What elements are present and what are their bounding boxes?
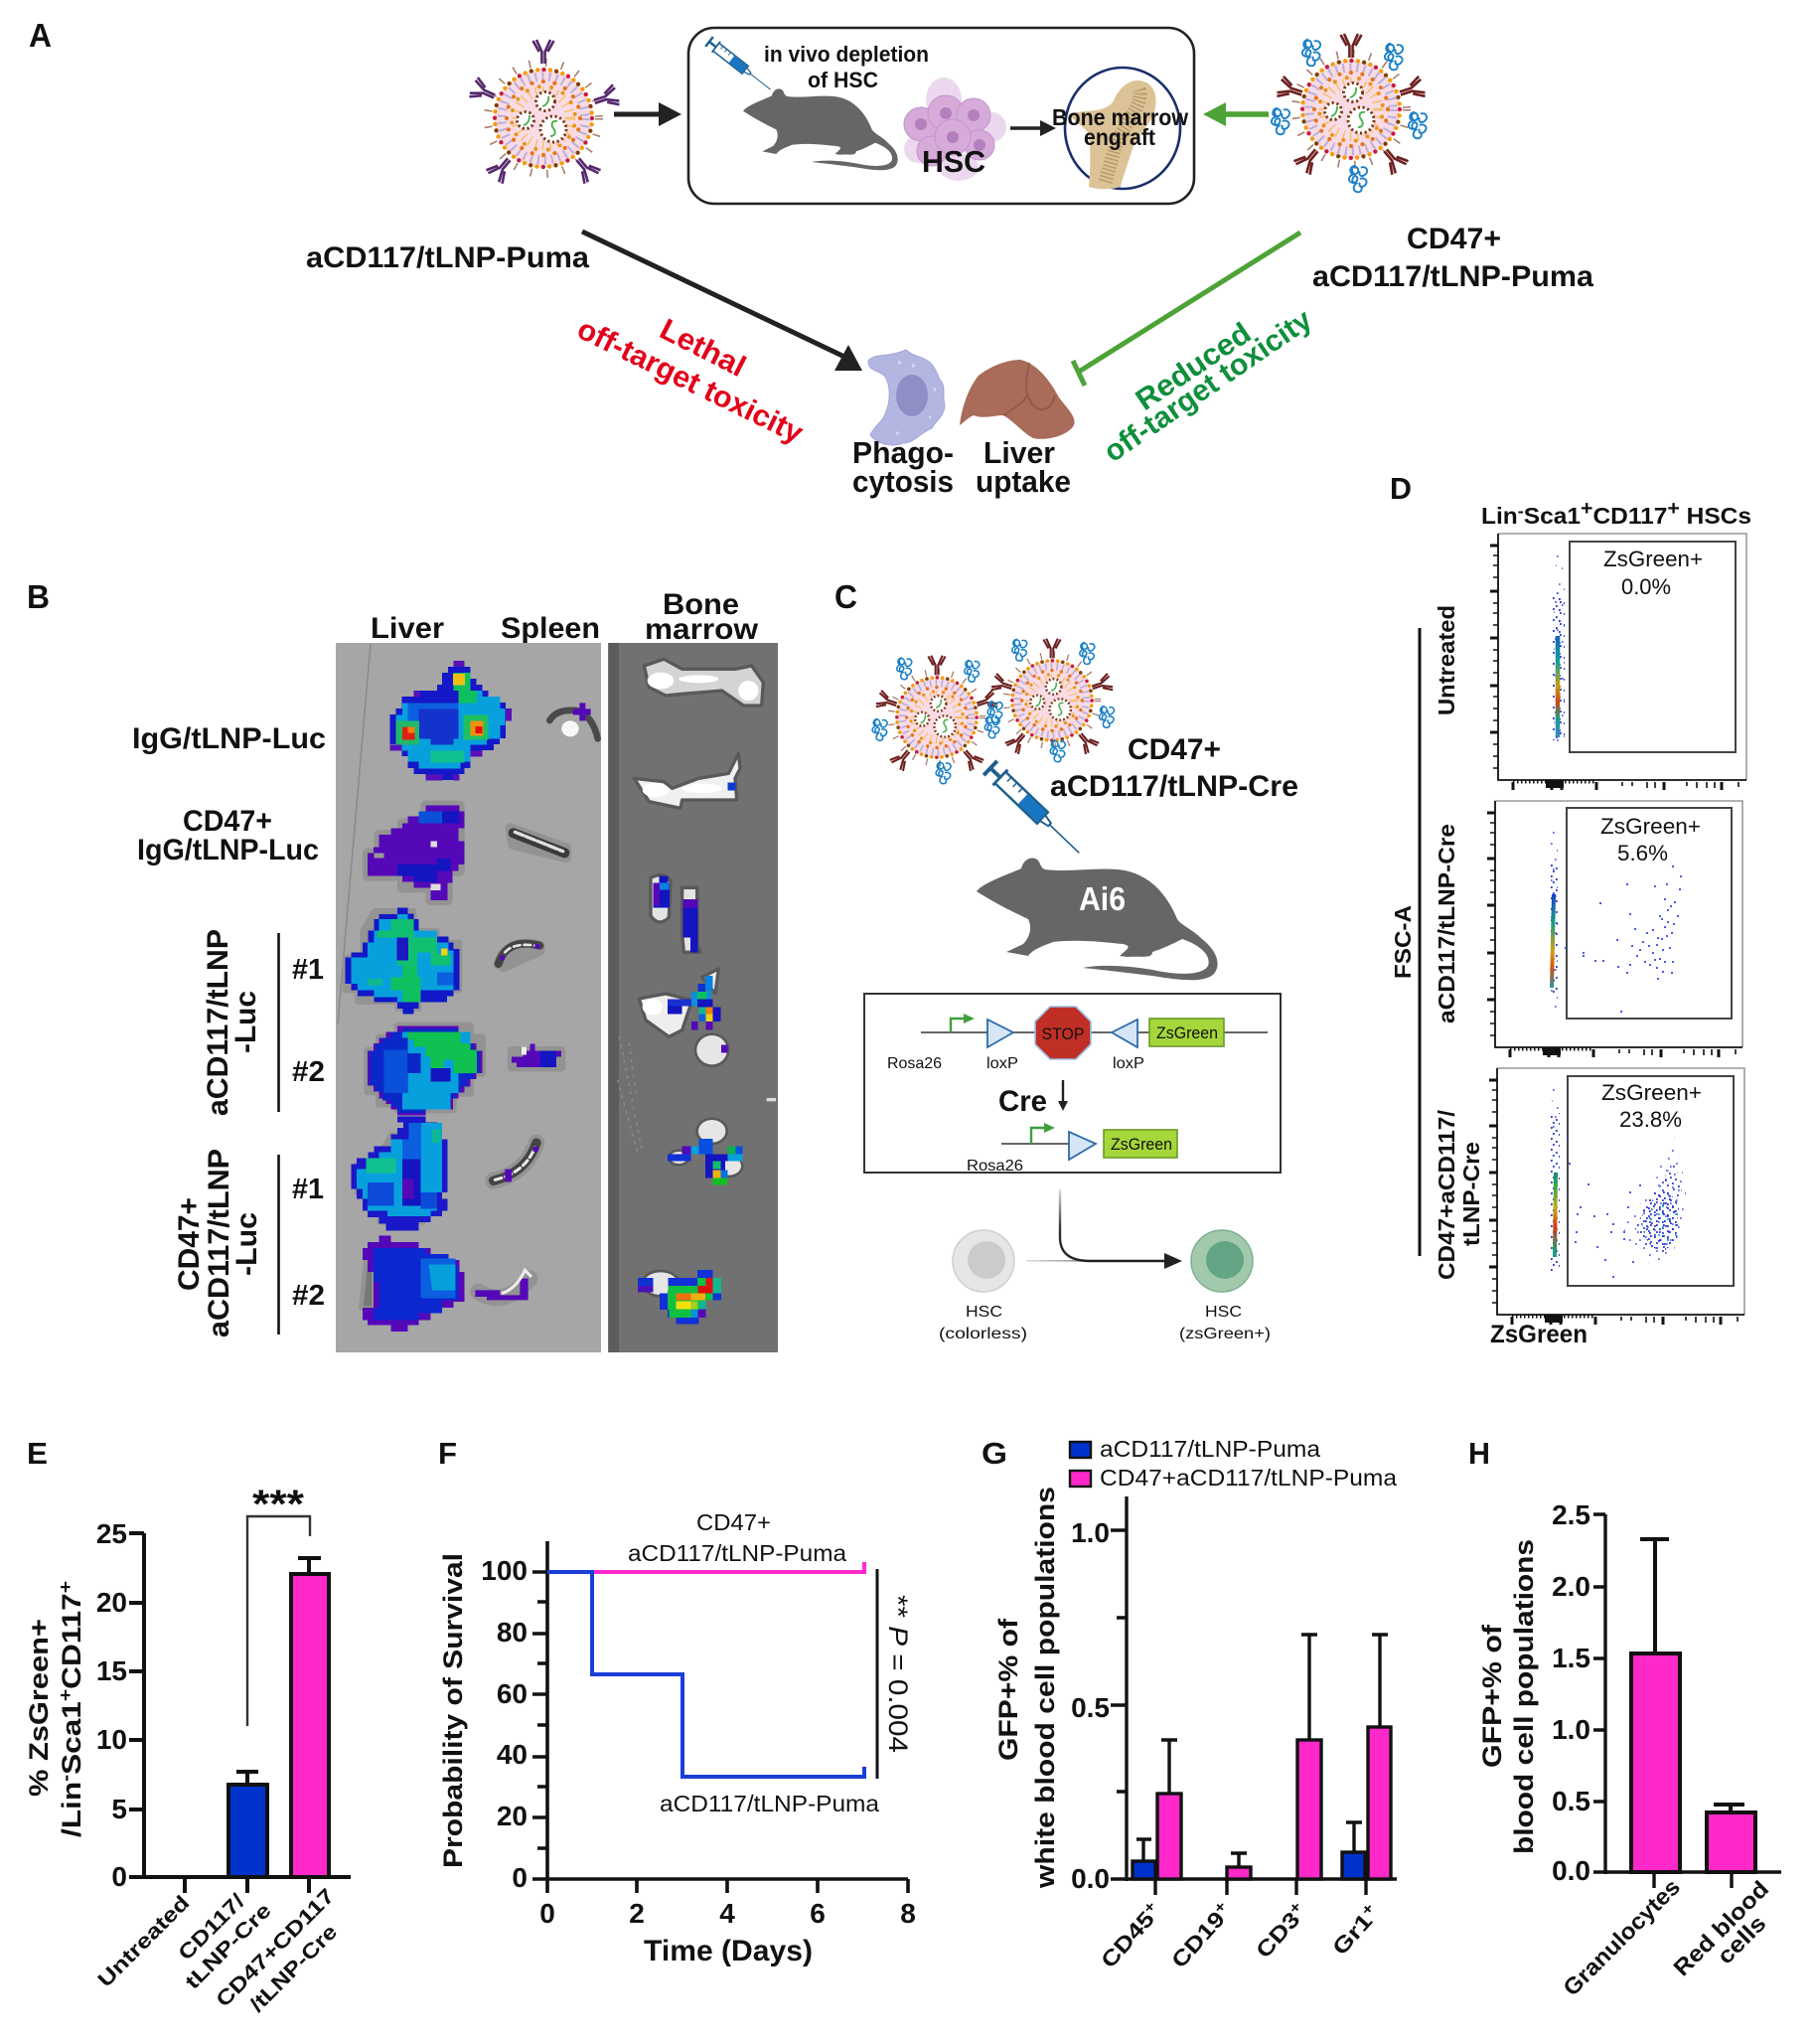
y tick labels: 0.5 — [1071, 1692, 1110, 1723]
spleen 5 — [494, 1143, 538, 1181]
y tick labels: 60 — [497, 1678, 528, 1709]
row labels: aCD117/tLNP-Cre — [1434, 824, 1459, 1023]
axes and ticks — [532, 1541, 908, 1893]
liver 5 — [351, 1116, 448, 1230]
ZsGreen box top: ZsGreen — [1156, 1023, 1218, 1042]
panel letter B: B — [27, 578, 50, 615]
y tick labels — [96, 1518, 127, 1892]
spleen 2 — [514, 832, 564, 853]
arrow: HSC to bone marrow — [1010, 120, 1056, 136]
icon: CD47 coated LNP — [1272, 34, 1427, 192]
icon: syringe — [705, 37, 775, 94]
title: Lin-Sca1+CD117+ HSCs: Sca1 — [1524, 503, 1581, 529]
flow plot: CD47+aCD117/tLNP-Cre: ZsGreen+ — [1601, 1080, 1702, 1105]
label: Bone marrow engraft — [1052, 104, 1188, 150]
x category labels: CD47+CD117 — [212, 1885, 339, 2012]
y tick labels: 20 — [96, 1587, 127, 1618]
panel letter C: C — [834, 578, 857, 615]
arrow: HSC colorless to zsGreen — [1026, 1189, 1182, 1269]
row labels: -Luc — [229, 991, 262, 1053]
panel letter D: D — [1390, 471, 1412, 506]
x category labels: CD3 — [1251, 1914, 1298, 1963]
label: (colorless) — [939, 1326, 1027, 1342]
title: Lin-Sca1+CD117+ HSCs: + — [1581, 498, 1592, 520]
liver 1 — [390, 661, 512, 780]
spleen 6 — [475, 1270, 531, 1300]
bars — [1133, 1635, 1391, 1879]
y axis label: + — [56, 1581, 76, 1593]
row labels: -Luc — [230, 1212, 263, 1276]
label: Cre with arrow: Cre — [998, 1085, 1047, 1118]
label: CD47+ aCD117/tLNP-Puma — [1312, 223, 1593, 293]
significance bracket — [247, 1483, 310, 1726]
y axis label: blood cell populations — [1509, 1539, 1539, 1854]
label: Ai6: Ai6 — [1079, 880, 1126, 917]
x category labels — [1095, 1898, 1385, 1972]
bars — [1631, 1539, 1755, 1872]
ZsGreen box bottom: ZsGreen — [1111, 1135, 1172, 1154]
x tick labels: 6 — [810, 1898, 826, 1929]
callout: lethal off-target toxicity: Lethal — [655, 313, 751, 384]
y tick labels: 0.0 — [1552, 1855, 1590, 1886]
scatter cluster — [1567, 1133, 1687, 1277]
label — [1179, 1304, 1271, 1342]
row labels: aCD117/tLNP — [202, 929, 234, 1116]
ZsGreen box bottom — [1104, 1130, 1177, 1158]
flow plot: aCD117/tLNP-Cre: ZsGreen+ — [1600, 814, 1701, 839]
x category labels: tLNP-Cre — [181, 1899, 276, 1994]
x category labels: CD19 — [1166, 1915, 1222, 1972]
label: Liver uptake — [976, 435, 1071, 499]
y tick labels: 5 — [111, 1794, 127, 1824]
y tick labels — [1552, 1499, 1590, 1886]
y tick labels — [481, 1555, 528, 1893]
label: HSC — [1205, 1304, 1242, 1321]
y tick labels: 2.5 — [1552, 1499, 1590, 1530]
callout: reduced off-target toxicity: Reduced — [1130, 317, 1257, 417]
column headers: Spleen — [501, 612, 600, 645]
x category labels: CD117/ — [174, 1890, 249, 1965]
x category labels: CD45 — [1096, 1915, 1151, 1972]
y tick labels: 2.0 — [1552, 1571, 1590, 1602]
column headers: Bone — [663, 588, 739, 621]
title: Lin-Sca1+CD117+ HSCs: + — [1667, 498, 1680, 520]
spleen 4 — [512, 1044, 561, 1067]
label: Liver uptake: Liver — [983, 435, 1055, 470]
arrow: LNP to in vivo box — [614, 102, 681, 126]
row labels: #1 — [292, 1174, 324, 1205]
label: Cre with arrow — [998, 1080, 1068, 1118]
construct labels: Rosa26 — [967, 1158, 1023, 1175]
inhibition line: green T bar — [1073, 233, 1300, 386]
text: in vivo depletion of HSC: in vivo depletion — [764, 42, 929, 67]
panel letter H: H — [1468, 1436, 1490, 1471]
y tick labels: 0 — [111, 1861, 127, 1892]
curve: aCD117 group — [547, 1572, 864, 1777]
row labels: #2 — [292, 1280, 325, 1312]
x category labels: /tLNP-Cre — [245, 1921, 342, 2017]
panel H: blood cell bar chart — [1468, 1436, 1781, 2001]
panel letter G: G — [982, 1436, 1007, 1471]
x category labels: Gr1 — [1327, 1915, 1371, 1960]
label: CD47+ aCD117/tLNP-Cre: CD47+ — [1128, 733, 1221, 766]
x category labels: cells — [1712, 1910, 1771, 1969]
label — [939, 1304, 1027, 1342]
construct labels: Rosa26 — [887, 1055, 942, 1072]
callout: lethal off-target toxicity: off-target toxicity — [572, 313, 809, 450]
label: CD47+ aCD117/tLNP-Puma: aCD117/tLNP-Puma — [1312, 260, 1593, 293]
label: CD47+ aCD117/tLNP-Puma: CD47+ — [696, 1509, 771, 1535]
x category labels: Untreated — [93, 1891, 194, 1992]
callout: reduced off-target toxicity: off-target toxicity — [1098, 303, 1318, 469]
y tick labels: 0.0 — [1071, 1863, 1110, 1894]
construct labels: loxP — [986, 1055, 1018, 1072]
y tick labels: 80 — [497, 1617, 528, 1648]
x tick labels: 0 — [539, 1898, 555, 1929]
column headers: marrow — [645, 613, 759, 646]
x category labels — [93, 1885, 342, 2017]
x tick labels: 4 — [719, 1898, 735, 1929]
legend — [1070, 1436, 1397, 1491]
panel letter A: A — [29, 17, 52, 54]
icon: Ai6 mouse — [977, 858, 1218, 980]
p value line: ** P = 0.004 — [883, 1595, 913, 1753]
y tick labels: 0.5 — [1552, 1786, 1590, 1816]
x category labels: Granulocytes — [1558, 1874, 1685, 2001]
label: CD47+ aCD117/tLNP-Puma: aCD117/tLNP-Puma — [628, 1540, 846, 1566]
legend: CD47+aCD117/tLNP-Puma — [1100, 1465, 1397, 1491]
flow plot: untreated: ZsGreen+ — [1603, 547, 1703, 571]
row labels: IgG/tLNP-Luc — [132, 722, 326, 755]
column headers — [371, 588, 759, 646]
axes and ticks — [1593, 1514, 1781, 1888]
icon: syringe — [983, 760, 1087, 861]
y axis label — [1477, 1539, 1539, 1854]
label: CD47+ aCD117/tLNP-Cre — [1050, 733, 1298, 803]
row labels: aCD117/tLNP — [203, 1149, 235, 1337]
label: FSC-A: FSC-A — [1390, 905, 1416, 979]
flow plot: aCD117/tLNP-Cre — [1487, 801, 1742, 1057]
y tick labels: 100 — [481, 1555, 528, 1586]
y axis label: Sca1 — [57, 1701, 86, 1775]
flow plot: CD47+aCD117/tLNP-Cre — [1489, 1068, 1744, 1325]
x category labels: + — [1358, 1900, 1378, 1919]
curve: CD47+ group — [592, 1562, 864, 1572]
label: aCD117/tLNP-Puma: aCD117/tLNP-Puma — [306, 241, 589, 274]
x category labels: + — [1211, 1898, 1230, 1917]
label: HSC — [966, 1304, 1002, 1321]
y tick labels: 20 — [497, 1801, 528, 1831]
liver 4 — [368, 1025, 482, 1116]
lower organs — [351, 1025, 561, 1332]
construct labels — [887, 1055, 1144, 1175]
flow plot: untreated — [1490, 534, 1746, 790]
axes and ticks — [1111, 1496, 1397, 1895]
icon: HSC cell cluster — [904, 78, 1006, 181]
title: Lin-Sca1+CD117+ HSCs: HSCs — [1680, 503, 1751, 529]
liver 2 — [368, 806, 465, 900]
icon: mouse silhouette — [743, 88, 898, 170]
label: Phago-cytosis: cytosis — [852, 464, 954, 499]
y tick labels: 0 — [512, 1862, 528, 1893]
y axis label: CD117 — [57, 1593, 86, 1689]
label: Bone marrow engraft: Bone marrow — [1052, 104, 1188, 130]
y axis label: + — [56, 1689, 76, 1701]
icon: phagocyte — [868, 350, 945, 445]
panel: in vivo depletion box — [688, 28, 1194, 204]
x axis label: ZsGreen: ZsGreen — [1490, 1321, 1588, 1348]
y tick labels: 40 — [497, 1739, 528, 1770]
tissue halos — [345, 806, 566, 1009]
y axis label: % ZsGreen+ — [24, 1619, 54, 1797]
y axis label: GFP+% of — [1477, 1624, 1507, 1768]
y axis label: Probability of Survival — [438, 1553, 468, 1868]
icon: aCD117 targeted LNP — [468, 40, 620, 185]
x category labels: + — [1140, 1898, 1159, 1917]
panel C: Ai6 reporter mouse experiment — [834, 578, 1298, 1342]
y tick labels: 10 — [96, 1724, 127, 1755]
label: Liver uptake: uptake — [976, 464, 1071, 499]
flow plot: CD47+aCD117/tLNP-Cre: 23.8% — [1619, 1107, 1682, 1132]
x category labels: + — [1286, 1898, 1305, 1918]
panel B: IVIS organ imaging — [27, 578, 778, 1352]
panel F: survival curve — [438, 1436, 916, 1967]
panel: Rosa26 construct box — [864, 994, 1281, 1175]
row labels: CD47+ — [183, 805, 272, 838]
x tick labels: 2 — [629, 1898, 645, 1929]
title: Lin-Sca1+CD117+ HSCs: Lin — [1481, 503, 1516, 529]
panel A: nanoparticle strategy overview — [29, 17, 1593, 499]
y axis label — [24, 1581, 86, 1837]
text: in vivo depletion of HSC: of HSC — [808, 68, 878, 92]
icon: bone marrow circle — [1052, 68, 1188, 189]
x axis label: Time (Days) — [644, 1935, 813, 1967]
y tick labels — [1071, 1517, 1110, 1894]
row labels: IgG/tLNP-Luc — [137, 834, 319, 866]
panel letter E: E — [27, 1436, 48, 1471]
legend: aCD117/tLNP-Puma — [1100, 1436, 1320, 1462]
y tick labels: 1.5 — [1552, 1643, 1590, 1673]
x tick labels — [539, 1898, 916, 1929]
y axis label: white blood cell populations — [1030, 1487, 1060, 1889]
spleen 3 — [499, 944, 539, 964]
upper organs — [345, 661, 598, 1015]
arrow: black diagonal to phagocytosis — [582, 232, 862, 371]
label: CD47+ aCD117/tLNP-Puma: CD47+ — [1407, 223, 1501, 255]
row labels: Untreated — [1434, 605, 1459, 715]
label: HSC: HSC — [922, 144, 985, 179]
row labels: tLNP-Cre — [1458, 1142, 1484, 1246]
panel D: flow cytometry plots — [1390, 471, 1751, 1348]
text: in vivo depletion of HSC — [764, 42, 929, 92]
arrow: green arrow to in vivo box — [1203, 102, 1269, 126]
x category labels — [1558, 1874, 1773, 2001]
construct labels: loxP — [1113, 1055, 1144, 1072]
x category labels: Red blood — [1668, 1875, 1773, 1981]
title: Lin-Sca1+CD117+ HSCs: - — [1518, 502, 1524, 521]
y tick labels: 15 — [96, 1655, 127, 1686]
row labels: #1 — [292, 954, 324, 986]
row labels: CD47+ — [173, 1197, 206, 1291]
ZsGreen box top — [1149, 1019, 1224, 1046]
imaging photo: liver and spleen — [336, 643, 601, 1352]
STOP sign — [1035, 1007, 1091, 1059]
label: CD47+ aCD117/tLNP-Puma — [628, 1509, 846, 1566]
row labels — [1434, 605, 1484, 1280]
flow plot: aCD117/tLNP-Cre: 5.6% — [1617, 841, 1668, 865]
panel G: white blood cell bar chart — [982, 1436, 1397, 1972]
loxP triangles — [987, 1020, 1137, 1160]
significance bracket: *** — [252, 1483, 304, 1526]
title: Lin-Sca1+CD117+ HSCs: CD117 — [1592, 503, 1667, 529]
row labels — [132, 722, 326, 1337]
icon: liver — [960, 360, 1075, 439]
axes and ticks — [129, 1533, 351, 1893]
label: Bone marrow engraft: engraft — [1084, 124, 1155, 150]
imaging photo: bone marrow — [608, 643, 778, 1352]
y axis label — [993, 1487, 1060, 1889]
row labels: #2 — [292, 1056, 325, 1088]
y axis label: /Lin — [57, 1790, 86, 1837]
panel letter F: F — [438, 1436, 457, 1471]
row labels: CD47+aCD117/ — [1434, 1109, 1459, 1280]
liver 6 — [363, 1235, 464, 1332]
STOP sign: STOP — [1041, 1024, 1085, 1043]
spleen 1 — [549, 703, 598, 738]
y tick labels: 25 — [96, 1518, 127, 1549]
y tick labels: 1.0 — [1071, 1517, 1110, 1548]
label: (zsGreen+) — [1179, 1326, 1271, 1342]
icon: HSC colorless — [939, 1230, 1027, 1342]
y tick labels: 1.0 — [1552, 1714, 1590, 1745]
column headers: Liver — [371, 612, 444, 645]
label: CD47+ aCD117/tLNP-Cre: aCD117/tLNP-Cre — [1050, 770, 1298, 803]
x tick labels: 8 — [900, 1898, 916, 1929]
icon: two CD47 coated LNPs — [872, 639, 1114, 784]
liver 3 — [345, 907, 460, 1015]
y axis label: GFP+% of — [993, 1618, 1023, 1761]
flow plot: untreated: 0.0% — [1621, 574, 1671, 599]
bracket line — [1419, 628, 1421, 1256]
icon: HSC zsGreen positive — [1179, 1230, 1271, 1342]
panel E: ZsGreen bar chart — [24, 1436, 351, 2017]
y axis label: - — [56, 1775, 76, 1782]
bars — [228, 1558, 329, 1877]
label: aCD117/tLNP-Puma: aCD117/tLNP-Puma — [660, 1791, 879, 1816]
label: Phago-cytosis: Phago- — [852, 435, 954, 470]
label: Phago-cytosis — [852, 435, 954, 499]
promoter arrows — [951, 1019, 1045, 1144]
